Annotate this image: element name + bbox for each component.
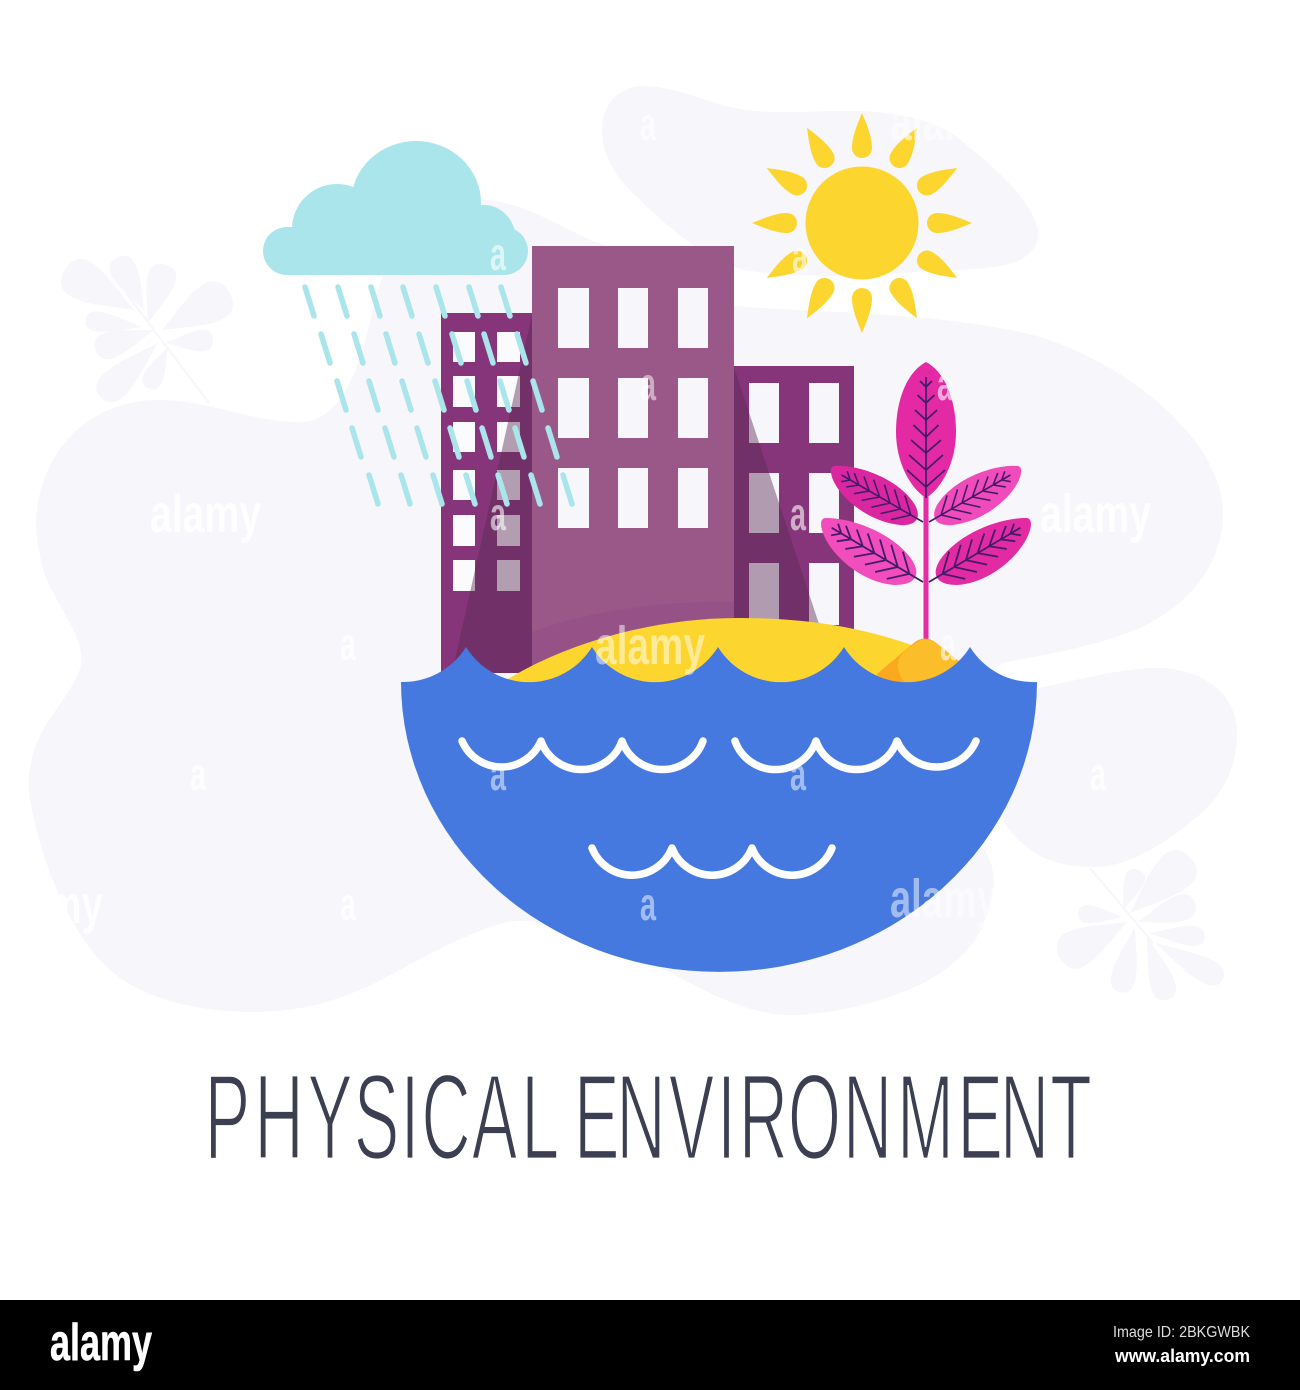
watermarks: a	[340, 878, 356, 930]
watermarks: a	[190, 748, 206, 800]
plant: stem	[924, 495, 928, 643]
watermarks: a	[640, 878, 656, 930]
sand hill	[500, 618, 965, 690]
watermarks: a	[792, 230, 808, 282]
image id: Image ID: 2BKGWBK	[1113, 1324, 1250, 1341]
watermarks: a	[790, 748, 806, 800]
rain	[305, 287, 572, 504]
plant: leaves	[821, 362, 1031, 596]
watermarks: a	[490, 748, 506, 800]
footer logo: alamy	[50, 1314, 152, 1372]
watermarks: alamy	[1040, 484, 1151, 544]
decorative leaf: right	[1051, 843, 1228, 1003]
watermarks: a	[490, 228, 506, 280]
wave lines	[462, 741, 976, 875]
sun	[752, 113, 972, 333]
watermarks: a	[640, 358, 656, 410]
leaf: upper right	[922, 463, 1021, 534]
footer bar	[0, 1300, 1300, 1390]
building: right tower	[734, 366, 854, 660]
watermarks: alamy	[595, 616, 705, 676]
decorative leaf: left	[55, 251, 239, 408]
building: left tower	[441, 313, 532, 673]
leaf: lower right	[921, 514, 1031, 596]
watermarks: a	[790, 488, 806, 540]
leaf: upper left	[831, 463, 930, 534]
building: centre tower	[532, 246, 734, 676]
watermarks: a	[1090, 748, 1106, 800]
leaf: lower left	[821, 514, 931, 596]
watermarks: a	[937, 358, 953, 410]
watermarks: alamy	[890, 92, 1000, 152]
watermarks: a	[340, 618, 356, 670]
watermarks: a	[940, 618, 956, 670]
watermarks: alamy	[150, 484, 261, 544]
water hemisphere	[401, 647, 1037, 972]
website: www.alamy.com	[1114, 1346, 1250, 1366]
cloud	[263, 141, 528, 275]
watermarks: a	[640, 98, 656, 150]
title: PHYSICAL ENVIRONMENT	[205, 1048, 1092, 1185]
leaf: top	[896, 362, 956, 498]
watermarks: alamy	[890, 869, 998, 929]
sand mound	[877, 638, 960, 690]
background blobs	[29, 86, 1237, 1015]
watermarks: a	[490, 488, 506, 540]
watermarks	[0, 92, 1151, 935]
